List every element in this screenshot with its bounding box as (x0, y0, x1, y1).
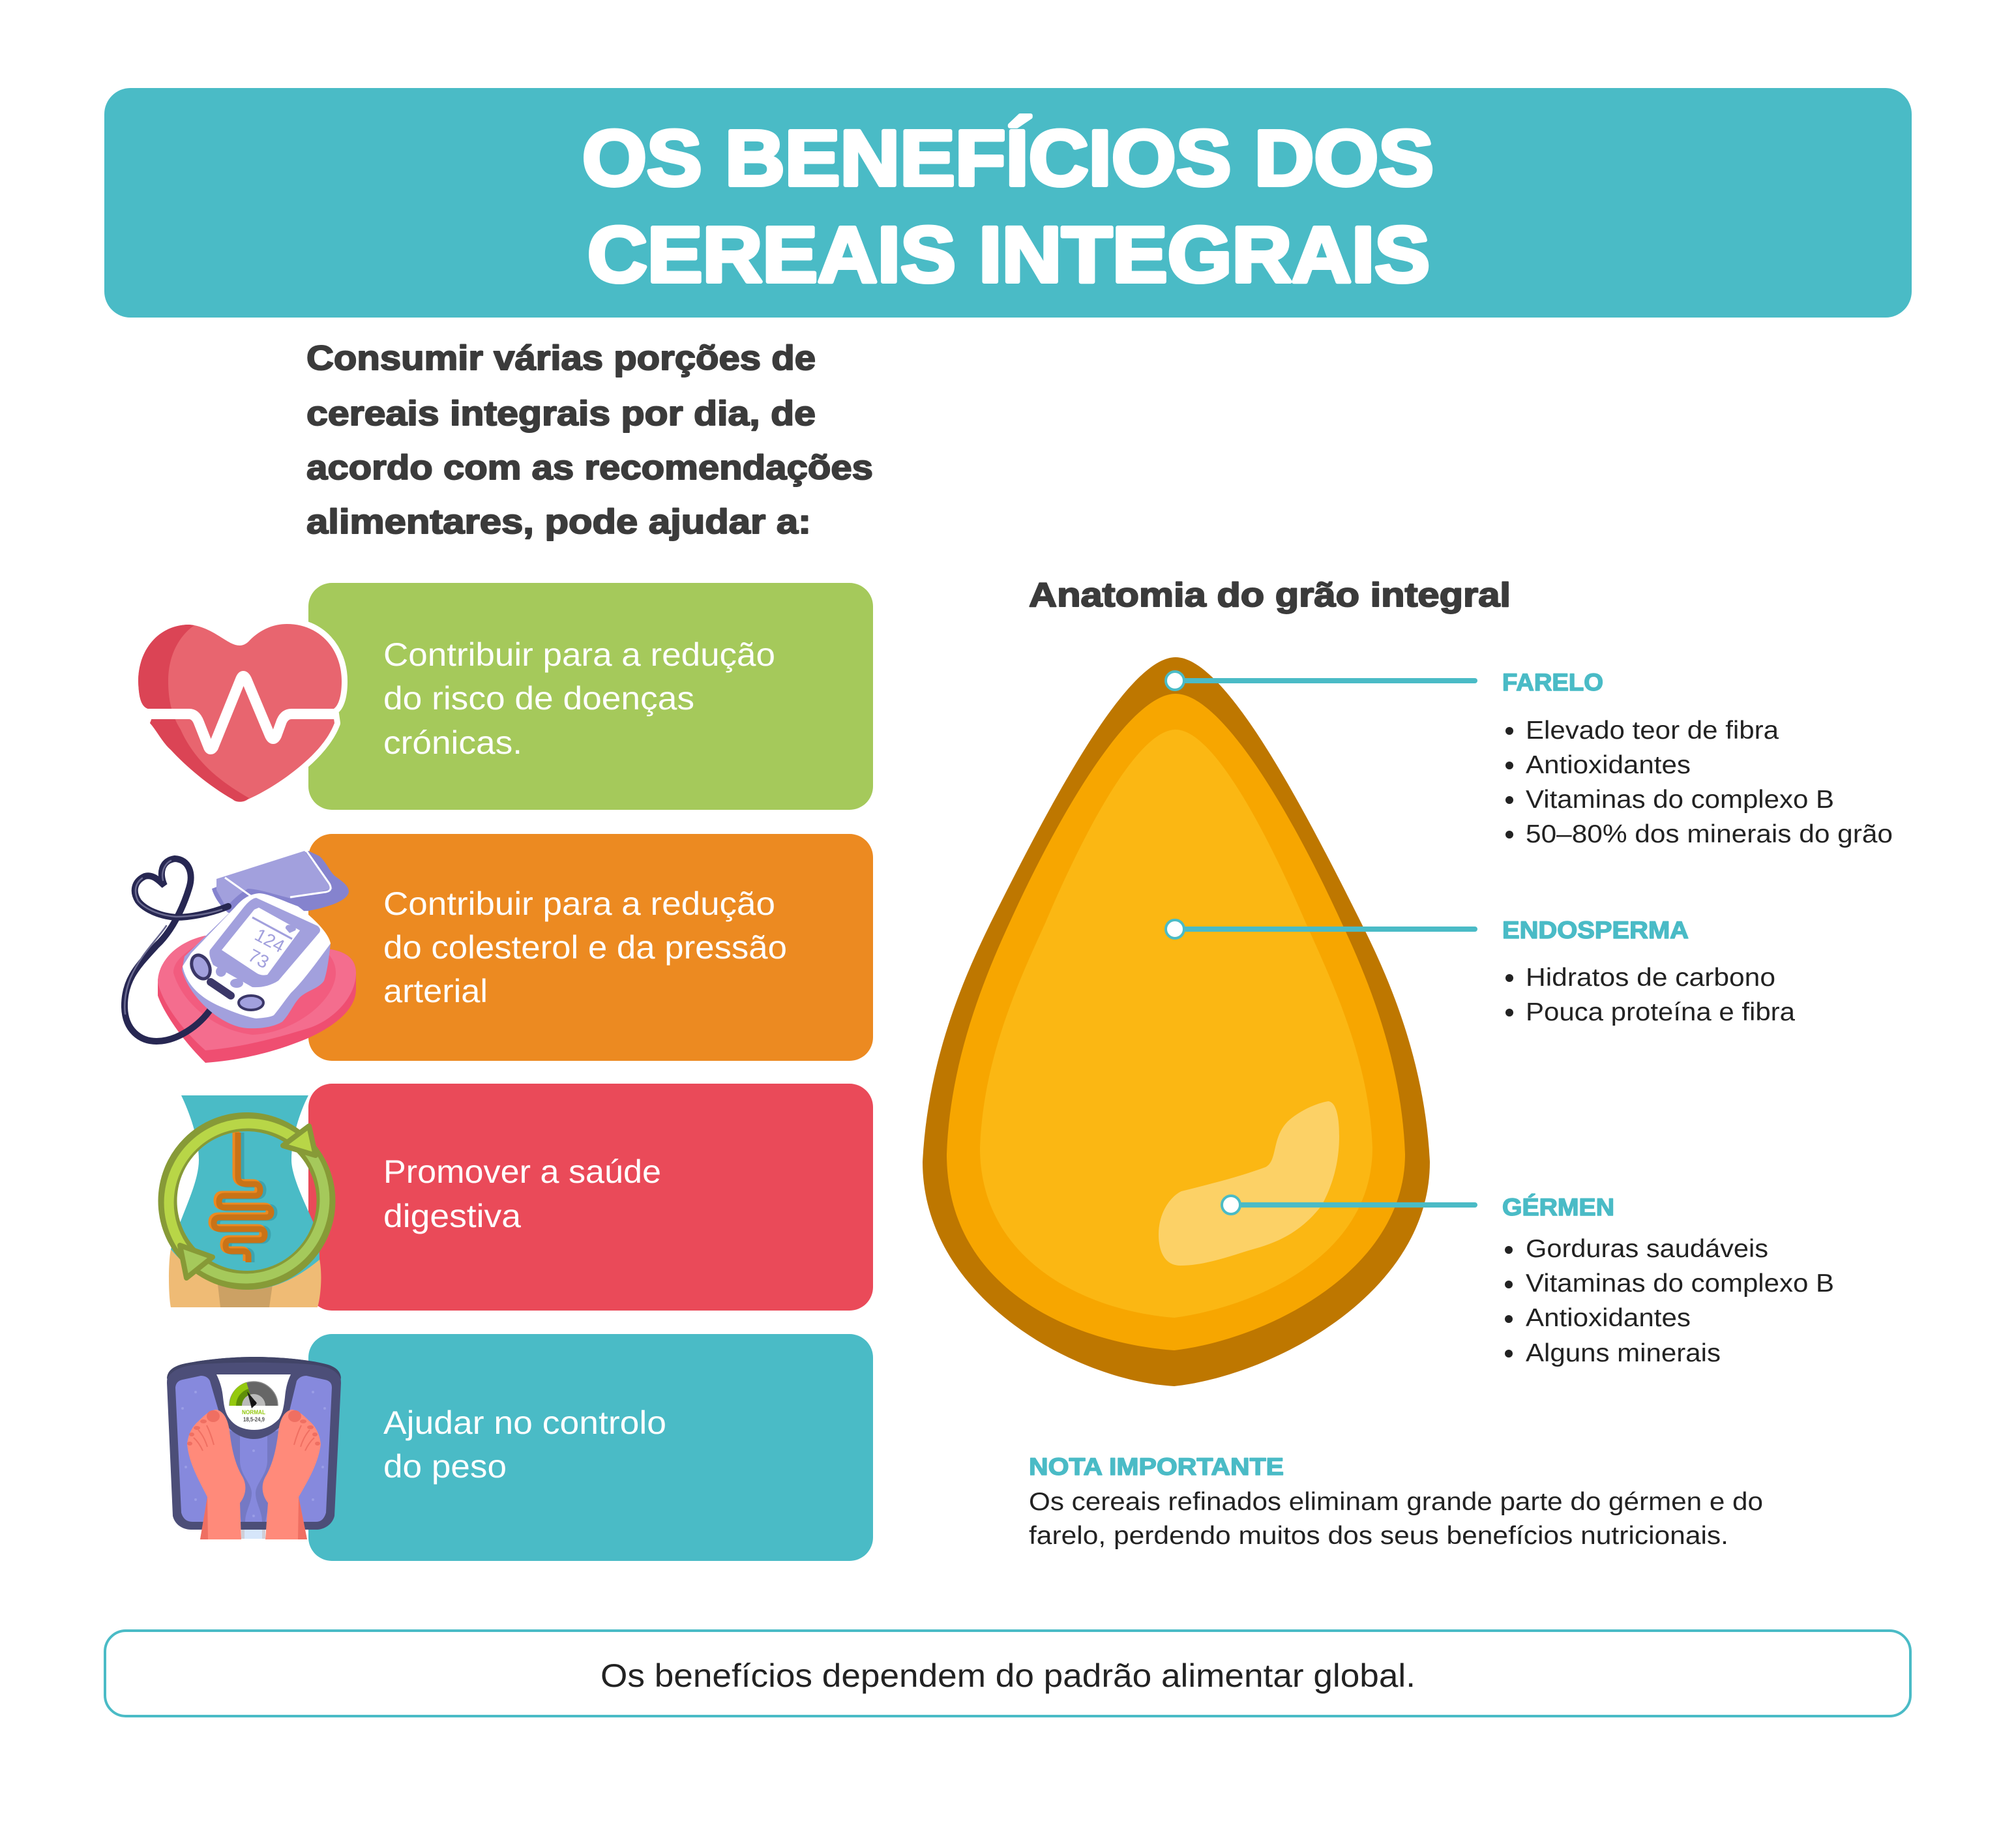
text block: endosperma: ENDOSPERMA (1502, 917, 1689, 943)
footer callout (105, 1631, 1910, 1716)
text block: farelo: FARELO (1502, 669, 1603, 696)
callout line: germen (1222, 1196, 1475, 1214)
intro text (306, 339, 873, 541)
monitor: 124 (252, 925, 288, 957)
gauge (230, 1382, 278, 1423)
text block: important note (1029, 1453, 1763, 1550)
text block: farelo: Antioxidantes (1526, 751, 1691, 779)
gauge: NORMAL (242, 1409, 265, 1416)
icon: heart with pulse (134, 624, 342, 802)
text block: farelo: Elevado teor de fibra (1526, 717, 1779, 745)
tube (125, 859, 228, 1041)
text block: germen: Vitaminas do complexo B (1526, 1269, 1834, 1298)
text block: farelo: 50–80% dos minerais do grão (1526, 820, 1893, 848)
intro text: acordo com as recomendações (306, 449, 873, 487)
intro text: alimentares, pode ajudar a: (306, 503, 811, 541)
callout line: endosperma (1166, 920, 1475, 938)
title banner (104, 88, 1912, 318)
panel: card weight control: do peso (383, 1448, 507, 1485)
text block: endosperma: Hidratos de carbono (1526, 964, 1775, 992)
feet (187, 1410, 321, 1539)
intestine (212, 1131, 274, 1262)
title text (582, 113, 1434, 299)
panel: card cholesterol and blood pressure: Contribuir para a redução (383, 885, 775, 922)
gauge: 18,5-24,9 (243, 1416, 265, 1423)
text block: germen: Antioxidantes (1526, 1304, 1691, 1332)
bran layer (923, 657, 1430, 1386)
panel: card digestive health (308, 1084, 873, 1311)
middle layer (947, 694, 1405, 1350)
text block: important note: farelo, perdendo muitos dos seus benefícios nutricionais. (1029, 1522, 1728, 1550)
grain diagram (923, 657, 1430, 1386)
text block: germen: Gorduras saudáveis (1526, 1235, 1768, 1263)
text block: farelo (1502, 669, 1893, 848)
text block: germen (1502, 1194, 1834, 1367)
title text: OS BENEFÍCIOS DOS (582, 113, 1434, 202)
panel: card digestive health: Promover a saúde (383, 1153, 661, 1190)
text block: endosperma (1502, 917, 1795, 1026)
icon: weighing scale with feet (167, 1357, 341, 1539)
title text: CEREAIS INTEGRAIS (587, 210, 1430, 299)
panel: card digestive health: digestiva (383, 1198, 521, 1234)
panel: card chronic diseases (308, 583, 873, 810)
cuff (212, 851, 349, 913)
panel: card cholesterol and blood pressure: do colesterol e da pressão (383, 929, 787, 966)
text block: germen: GÉRMEN (1502, 1194, 1614, 1221)
panel: card cholesterol and blood pressure: arterial (383, 973, 488, 1009)
panel: card weight control: Ajudar no controlo (383, 1404, 666, 1441)
monitor: 73 (245, 945, 273, 972)
panel: card chronic diseases: crónicas. (383, 724, 522, 761)
intro text: cereais integrais por dia, de (306, 394, 816, 433)
intro text: Consumir várias porções de (306, 339, 816, 378)
monitor (182, 893, 331, 1028)
text block: farelo: Vitaminas do complexo B (1526, 786, 1834, 814)
panel: card chronic diseases: Contribuir para a redução (383, 636, 775, 673)
heart base (158, 936, 356, 1063)
endosperm (980, 730, 1372, 1318)
panel: card weight control (308, 1334, 873, 1561)
panel: card chronic diseases: do risco de doenças (383, 680, 694, 717)
text block: important note: NOTA IMPORTANTE (1029, 1453, 1284, 1480)
text block: important note: Os cereais refinados eliminam grande parte do gérmen e do (1029, 1488, 1763, 1516)
circular arrows (168, 1121, 326, 1281)
callout line: farelo (1166, 672, 1475, 690)
germ (1159, 1101, 1339, 1266)
heading: anatomy of the grain: Anatomia do grão integral (1029, 576, 1511, 614)
footer callout: Os benefícios dependem do padrão alimentar global. (600, 1657, 1416, 1694)
icon: blood pressure monitor on heart (125, 851, 356, 1063)
panel: card cholesterol and blood pressure (308, 834, 873, 1061)
text block: germen: Alguns minerais (1526, 1339, 1721, 1367)
icon: digestive waist (168, 1095, 326, 1307)
text block: endosperma: Pouca proteína e fibra (1526, 998, 1795, 1026)
